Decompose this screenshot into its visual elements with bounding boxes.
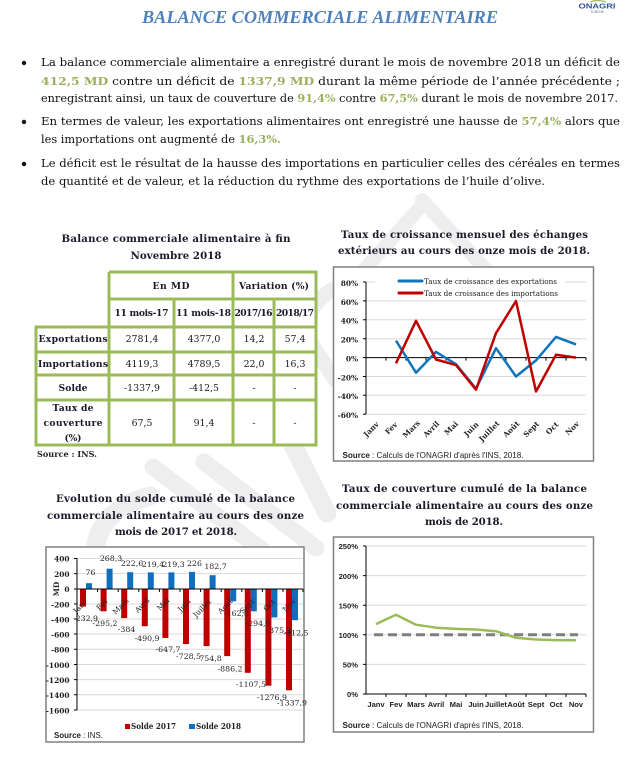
- axis labels: Août: [500, 419, 522, 440]
- heading: balance chart: mois de 2017 et 2018.: [115, 526, 237, 538]
- line chart: monthly growth: 0%: [346, 354, 358, 364]
- bullet 2: [22, 114, 620, 146]
- text block: key points: [22, 55, 620, 188]
- table: balance commerciale: Solde: [58, 383, 88, 394]
- heading: balance chart: [47, 493, 305, 538]
- axis labels: Janv: [71, 597, 90, 616]
- source: Source : Calculs de l'ONAGRI d'après l'INS, 2018.: [342, 721, 524, 730]
- data labels: -1337,9: [277, 698, 307, 708]
- line chart: monthly growth: -60%: [338, 411, 358, 420]
- axis labels: Avril: [421, 419, 441, 440]
- line chart: coverage rate: 50%: [343, 660, 358, 670]
- axis labels: Mars: [111, 596, 131, 616]
- table: balance commerciale: 67,5: [132, 418, 152, 429]
- table: balance commerciale: En MD: [152, 281, 190, 292]
- series: importations: [396, 301, 576, 392]
- table: balance commerciale: 2781,4: [126, 334, 158, 345]
- bullet 1: enregistrant ainsi, un taux de couverture de 91,4% contre 67,5% durant le mois de novembre 2017.: [41, 91, 618, 105]
- axis labels: Août: [215, 597, 235, 616]
- bar chart: cumulative balance: -400: [51, 616, 70, 624]
- series: solde 2017: [80, 589, 292, 690]
- axis labels: [367, 700, 584, 709]
- axis labels: Mai: [450, 700, 462, 709]
- bar chart: cumulative balance: 200: [54, 570, 70, 579]
- title: BALANCE COMMERCIALE ALIMENTAIRE: [141, 7, 498, 27]
- table: balance commerciale: Exportations: [38, 334, 108, 345]
- axis labels: Avril: [132, 595, 152, 615]
- line chart: coverage rate: 100%: [339, 631, 358, 640]
- heading: coverage chart: mois de 2018.: [425, 516, 503, 528]
- axis labels: Fev: [389, 700, 403, 709]
- axis labels: Fev: [94, 596, 111, 612]
- bullet 2: les importations ont augmenté de 16,3%.: [41, 132, 281, 146]
- bar chart: cumulative balance: 0: [64, 585, 70, 594]
- data labels: 222,6: [121, 559, 143, 568]
- data labels: -384: [118, 625, 135, 634]
- axis labels: Mai: [442, 419, 460, 437]
- bullet 1: La balance commerciale alimentaire a enregistré durant le mois de novembre 2018 un déficit de: [41, 55, 620, 69]
- axis labels: Sept: [238, 597, 256, 615]
- axis labels: Mars: [407, 700, 425, 709]
- table: balance commerciale: Taux de: [52, 403, 94, 414]
- heading: balance chart: Evolution du solde cumulé de la balance: [56, 493, 296, 505]
- axis labels: Oct: [261, 597, 277, 613]
- bar chart: cumulative balance: -1000: [46, 661, 70, 670]
- bar chart: cumulative balance: -1400: [46, 691, 70, 700]
- bullet 2: En termes de valeur, les exportations alimentaires ont enregistré une hausse de 57,4% alors que: [41, 114, 620, 128]
- data labels: -1107,5: [236, 680, 266, 689]
- data labels: -728,5: [176, 652, 201, 661]
- axis labels: Oct: [550, 700, 563, 709]
- axis labels: Juillet: [191, 597, 213, 620]
- bar chart: cumulative balance: 400: [54, 554, 70, 564]
- heading: coverage chart: [336, 483, 594, 528]
- heading: coverage chart: Taux de couverture cumulé de la balance: [342, 483, 588, 495]
- logo: ONAGRI: [578, 4, 616, 10]
- data labels: -412,5: [284, 628, 309, 638]
- series: solde 2018: [86, 569, 298, 620]
- data labels: 754,8: [199, 654, 222, 663]
- table: balance commerciale: couverture: [44, 418, 103, 429]
- bar chart: cumulative balance: [46, 547, 309, 742]
- data labels: -375,2: [267, 626, 292, 635]
- table: balance commerciale: 4789,5: [188, 359, 220, 370]
- bullet 3: [22, 156, 620, 188]
- table: balance commerciale: -: [293, 383, 297, 394]
- table: balance commerciale: 11 mois-18: [176, 308, 231, 319]
- bar chart: cumulative balance: -200: [51, 600, 70, 610]
- table: balance commerciale: 11 mois-17: [114, 308, 168, 319]
- heading: table: Balance commerciale alimentaire à fin: [62, 233, 291, 245]
- table: balance commerciale: 16,3: [285, 359, 305, 370]
- data labels: -294,0: [246, 619, 271, 628]
- source: table: Source : INS.: [37, 449, 97, 459]
- line chart: coverage rate: 150%: [339, 602, 358, 610]
- data labels: -1276,9: [257, 693, 287, 702]
- axis labels: Nov: [563, 419, 582, 437]
- data labels: 182,7: [204, 562, 227, 571]
- heading: coverage chart: commerciale alimentaire au cours des onze: [336, 500, 594, 512]
- table: balance commerciale: Importations: [38, 359, 108, 370]
- source: Source : INS.: [54, 731, 103, 740]
- heading: table: Novembre 2018: [130, 250, 222, 262]
- line chart: monthly growth: -40%: [338, 392, 358, 401]
- series: exportations: [396, 337, 576, 389]
- table: balance commerciale: 4119,3: [126, 359, 158, 370]
- heading: balance chart: commerciale alimentaire au cours des onze: [47, 510, 305, 522]
- table: balance commerciale: -: [293, 418, 297, 429]
- legend: [399, 277, 558, 298]
- axis labels: Nov: [569, 700, 584, 709]
- series: seuil 100%: [374, 633, 578, 636]
- table: balance commerciale: Variation (%): [238, 281, 309, 292]
- axis labels: Janv: [367, 700, 385, 709]
- axis labels: Juillet: [476, 419, 502, 444]
- bar chart: cumulative balance: -800: [51, 646, 70, 654]
- axis labels: [361, 419, 582, 444]
- data labels: -490,9: [135, 634, 160, 643]
- line chart: monthly growth: [334, 267, 594, 461]
- axis labels: Juin: [468, 700, 484, 709]
- table: balance commerciale: -: [252, 383, 256, 394]
- logo: [578, 0, 616, 14]
- axis labels: [71, 595, 298, 620]
- table: balance commerciale: -412,5: [189, 383, 219, 394]
- data labels: -647,7: [156, 645, 181, 654]
- bullet 3: Le déficit est le résultat de la hausse des importations en particulier celles des céréales en termes: [41, 156, 620, 170]
- axis labels: Avril: [428, 700, 444, 709]
- heading: growth chart: [338, 229, 590, 257]
- legend: Solde 2017: [131, 721, 176, 731]
- table: balance commerciale: 4377,0: [188, 334, 220, 345]
- line chart: monthly growth: 20%: [341, 336, 358, 344]
- table: balance commerciale: 14,2: [244, 334, 264, 345]
- axis labels: Fev: [383, 420, 400, 436]
- heading: growth chart: extérieurs au cours des onze mois de 2018.: [338, 245, 590, 257]
- line chart: monthly growth: -20%: [338, 374, 358, 382]
- data labels: -232,9: [73, 614, 98, 623]
- heading: table: [62, 233, 291, 262]
- heading: growth chart: Taux de croissance mensuel des échanges: [341, 229, 588, 241]
- line chart: coverage rate: 250%: [339, 542, 358, 551]
- axis labels: Sept: [521, 419, 541, 439]
- data labels: [73, 554, 309, 708]
- bar chart: cumulative balance: MD: [52, 581, 61, 596]
- table: balance commerciale: -1337,9: [124, 383, 160, 394]
- data labels: 219,4: [142, 560, 164, 569]
- data labels: -295,2: [93, 619, 118, 628]
- table: balance commerciale: 22,0: [244, 359, 264, 370]
- legend: Solde 2018: [196, 721, 241, 731]
- data labels: 268,3: [100, 554, 122, 563]
- bullet 1: [22, 55, 620, 105]
- legend: Taux de croissance des exportations: [424, 277, 557, 286]
- bar chart: cumulative balance: -1200: [46, 676, 70, 685]
- axis labels: Sept: [528, 700, 545, 709]
- legend: [125, 721, 241, 731]
- table: balance commerciale: -: [252, 418, 256, 429]
- line chart: coverage rate: [334, 537, 594, 732]
- bullet 3: de quantité et de valeur, et la réduction du rythme des exportations de l’huile d’olive.: [41, 174, 545, 188]
- line chart: monthly growth: 60%: [341, 298, 358, 307]
- line chart: monthly growth: 80%: [341, 279, 358, 288]
- data labels: 226: [187, 559, 202, 568]
- table: balance commerciale: [36, 272, 316, 445]
- legend: Taux de croissance des importations: [424, 289, 558, 298]
- table: balance commerciale: 91,4: [194, 418, 214, 429]
- axis labels: Août: [507, 700, 525, 709]
- axis labels: Mars: [401, 419, 422, 440]
- data labels: -886,2: [218, 664, 243, 674]
- axis labels: Juin: [175, 597, 193, 614]
- watermark: [95, 200, 500, 552]
- table: balance commerciale: 57,4: [285, 334, 305, 345]
- line chart: coverage rate: 200%: [339, 572, 358, 581]
- table: balance commerciale: (%): [64, 433, 82, 444]
- axis labels: Juillet: [485, 700, 507, 709]
- line chart: monthly growth: 40%: [341, 316, 358, 326]
- bar chart: cumulative balance: -1600: [46, 706, 70, 716]
- line chart: coverage rate: 0%: [347, 690, 358, 699]
- data labels: -162,8: [224, 609, 249, 618]
- axis labels: Oct: [544, 420, 561, 436]
- axis labels: Mai: [155, 596, 172, 612]
- source: Source : Calculs de l'ONAGRI d'après l'INS, 2018.: [342, 451, 524, 460]
- bullet 1: 412,5 MD contre un déficit de 1337,9 MD durant la même période de l’année précédente ;: [41, 74, 620, 88]
- table: balance commerciale: 2017/16: [234, 308, 272, 319]
- table: balance commerciale: 2018/17: [276, 308, 314, 319]
- data labels: 76: [86, 568, 95, 577]
- axis labels: Juin: [461, 420, 481, 439]
- axis labels: Nov: [281, 596, 298, 614]
- logo: TUNISIE: [590, 10, 605, 14]
- data labels: 219,3: [162, 560, 185, 569]
- bar chart: cumulative balance: -600: [51, 630, 70, 640]
- series: taux de couverture: [376, 615, 576, 640]
- axis labels: Janv: [361, 419, 381, 439]
